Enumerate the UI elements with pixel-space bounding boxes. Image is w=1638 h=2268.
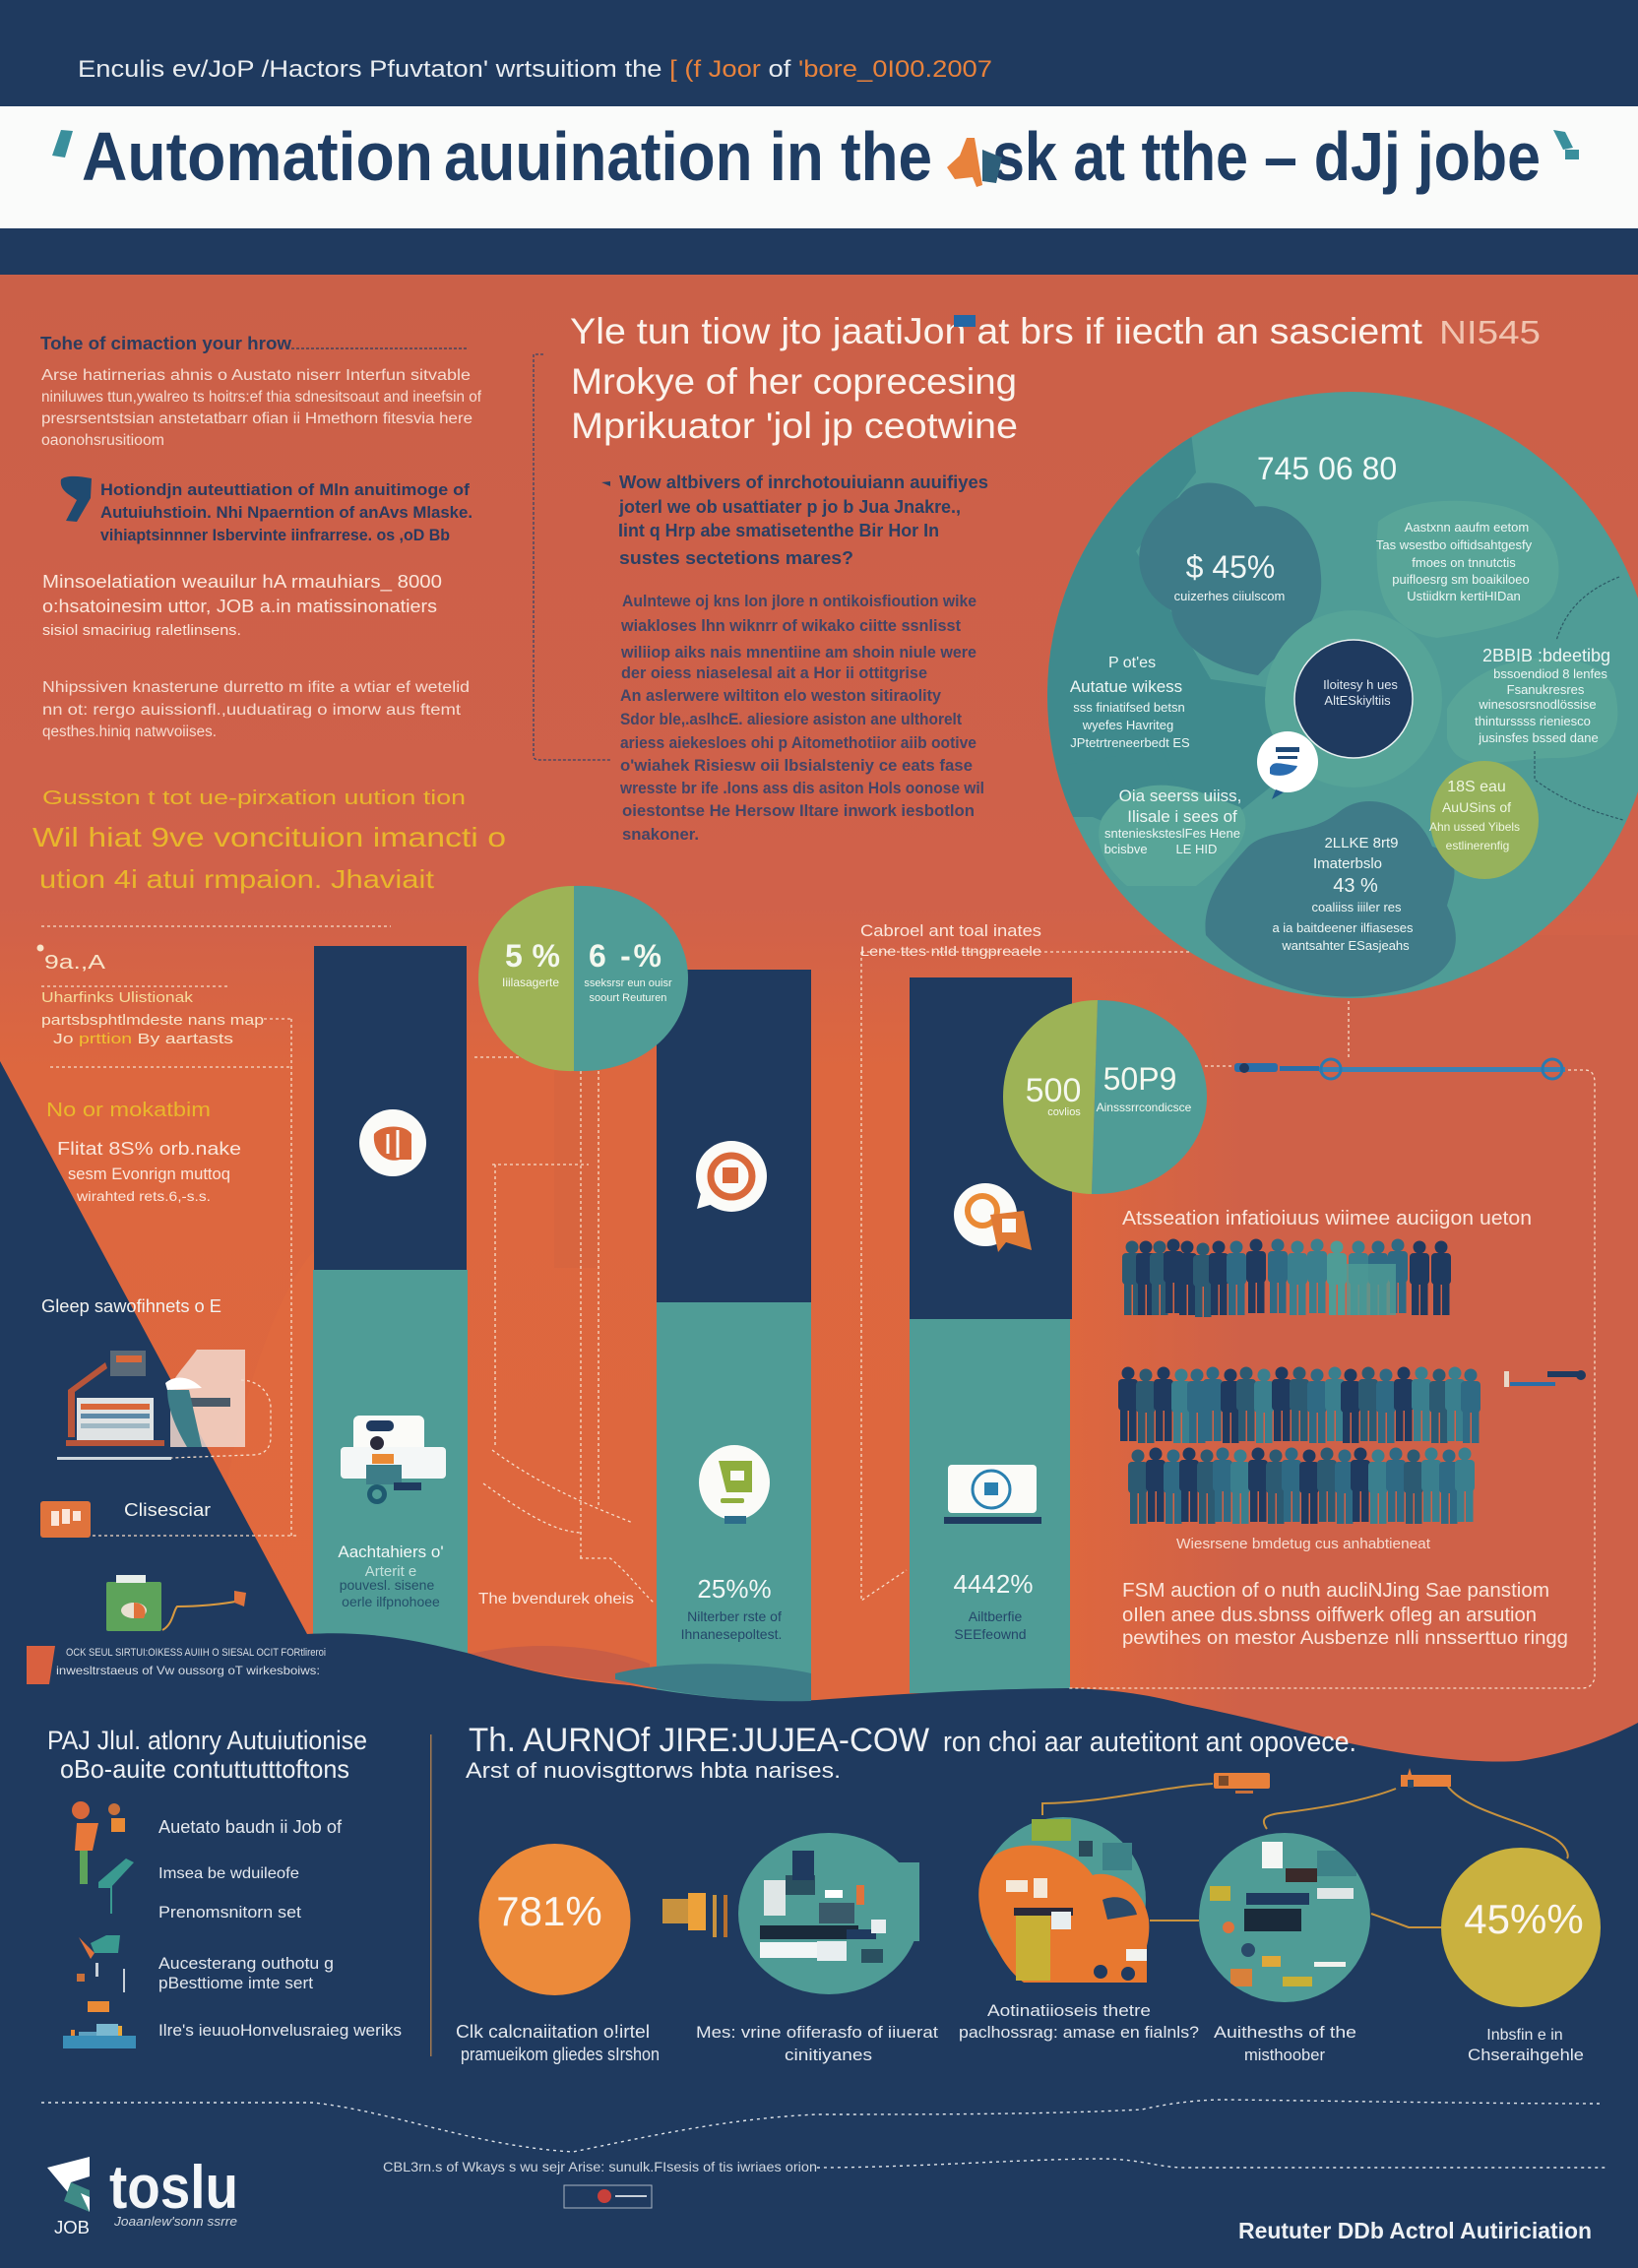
- note: stat lines: sesm Evonrign muttoq: [68, 1165, 230, 1183]
- chart: big circle diagram: [1047, 392, 1638, 998]
- text: lower left blob: snteniesksteslFes Hene: [1104, 826, 1240, 841]
- captions: pramueikom gliedes sIrshon: [461, 2045, 660, 2064]
- flow node: orange box 1: [1214, 1773, 1270, 1794]
- title text: – dJj jobe: [1264, 118, 1541, 195]
- crowd paragraph: FSM auction of o nuth aucliNJing Sae panstiom: [1122, 1580, 1549, 1602]
- crowd paragraph: [1122, 1580, 1568, 1649]
- annotation above bars: Cabroel ant toal inates: [860, 921, 1041, 940]
- white highlight text: o:hsatoinesim uttor, JOB a.in matissinonatiers: [42, 597, 437, 616]
- text: green blob: AuUSins of: [1442, 799, 1511, 815]
- crowd caption: Wiesrsene bmdetug cus anhabtieneat: [1176, 1536, 1431, 1552]
- icon: bar 2 device: [699, 1445, 770, 1524]
- note: yellow-white callout: [37, 945, 264, 1047]
- captions: cinitiyanes: [785, 2046, 872, 2064]
- icon: gear arm: [77, 1935, 125, 2012]
- annotation above bars: [860, 921, 1041, 959]
- list items: Auetato baudn ii Job of: [158, 1817, 343, 1837]
- text: right blob: thinturssss rieniesco: [1475, 714, 1591, 728]
- pie 1 values: 6 -%: [589, 938, 662, 974]
- text: bottom blob: Imaterbslo: [1313, 855, 1382, 872]
- crowd paragraph: pewtihes on mestor Ausbenze nlli nnsserttuo ringg: [1122, 1628, 1568, 1649]
- text: lower left blob: bcisbve LE HID: [1104, 842, 1217, 856]
- intro paragraph: [41, 367, 482, 449]
- icon: orange tag: [40, 1501, 91, 1538]
- icon: small blue cable: [1504, 1370, 1586, 1387]
- text: bottom blob: coaliiss iiiler res: [1311, 900, 1402, 914]
- captions: misthoober: [1244, 2046, 1325, 2064]
- note: yellow-white callout: 9a.,A: [44, 952, 106, 974]
- crowd row 2: [1118, 1366, 1480, 1443]
- intro paragraph: presrsentstsian anstetatbarr ofian ii Hmethorn fitesvia here: [41, 410, 472, 427]
- white highlight text: [42, 572, 442, 639]
- navy callout text: [100, 480, 472, 544]
- note: stat lines: [57, 1139, 241, 1204]
- text: green blob: 18S eau: [1447, 779, 1506, 795]
- text: lower left blob: [1104, 787, 1241, 856]
- text: right blob: winesosrsnodlössise: [1478, 697, 1597, 712]
- pie: first split circle: [478, 886, 688, 1071]
- footnote with tag: [27, 1646, 326, 1684]
- text: green blob: estlinerenfig: [1446, 839, 1509, 852]
- third paragraph: [42, 679, 470, 740]
- intro paragraph: Arse hatirnerias ahnis o Austato niserr Interfun sitvable: [41, 367, 471, 384]
- centre body paragraph: oiestontse He Hersow Iltare inwork iesbotlon: [622, 802, 975, 820]
- stat: top left blob: $ 45%: [1186, 549, 1275, 585]
- label: tag text: Clisesciar: [124, 1500, 211, 1520]
- text: right blob: [1475, 646, 1610, 745]
- icon: bar 2 chat: [696, 1141, 767, 1212]
- text: right blob: jusinsfes bssed dane: [1478, 730, 1599, 745]
- centre body paragraph: snakoner.: [622, 826, 699, 844]
- text: left blob: wyefes Havriteg: [1082, 718, 1173, 732]
- text: left blob: [1070, 655, 1190, 750]
- pie 1 values: 5 %: [505, 938, 560, 974]
- note: yellow label: No or mokatbim: [46, 1100, 211, 1121]
- pie 1 values: sseksrsr eun ouisr: [584, 977, 672, 989]
- pie 2 values: [1026, 1061, 1192, 1118]
- footer: logo: Joaanlew'sonn ssrre: [113, 2214, 237, 2229]
- icon: blue workstation: [63, 2024, 136, 2048]
- icon: person at desk: [72, 1801, 134, 1914]
- crowd row 1: [1122, 1238, 1451, 1317]
- text: bar 1 labels: oerle ilfpnohoee: [342, 1594, 440, 1609]
- note: yellow-white callout: Jo prttion By aartasts: [53, 1031, 233, 1047]
- navy callout text: vihiaptsinnner Isbervinte iinfrarrese. os ,oD Bb: [100, 526, 450, 544]
- icon: navy seven mark: [61, 476, 92, 522]
- captions: Chseraihgehle: [1468, 2046, 1584, 2064]
- panel: left column notes: [37, 945, 264, 1316]
- captions: Inbsfin e in: [1486, 2027, 1563, 2044]
- flow heading: Arst of nuovisgttorws hbta narises.: [466, 1758, 841, 1783]
- flow node: orange box 2: [1401, 1768, 1451, 1788]
- icon: white chat bubble: [1257, 731, 1318, 799]
- green blob: [1430, 761, 1539, 879]
- text: left blob: Autatue wikess: [1070, 677, 1182, 696]
- footer: reference box: [564, 2185, 652, 2208]
- text: bar 2 labels: 25%%: [697, 1574, 772, 1604]
- centre body paragraph: wiakloses lhn wiknrr of wikako ciitte ssnlisst: [620, 617, 961, 635]
- text: top right blob: fmoes on tnnutctis: [1412, 555, 1516, 570]
- list items: [158, 1817, 402, 2040]
- text: right blob: Fsanukresres: [1507, 682, 1585, 697]
- text: left blob: JPtetrtreneerbedt ES: [1070, 735, 1190, 750]
- centre body paragraph: o'wiahek Risiesw oii lbsialsteniy ce eats fase: [620, 757, 973, 775]
- text: green blob: [1429, 779, 1520, 852]
- icon: bar 3 laptop: [944, 1465, 1041, 1524]
- flow node: teal circle board: [1199, 1833, 1370, 2002]
- stat: top left blob: cuizerhes ciiulscom: [1174, 589, 1285, 603]
- icon: bar 1 machine: [341, 1416, 446, 1504]
- text: left blob: P ot'es: [1108, 655, 1156, 671]
- text: bar 3 labels: 4442%: [954, 1569, 1033, 1599]
- stat: orange circle: 781%: [496, 1888, 602, 1934]
- panel: centre heading and question: [570, 311, 1541, 844]
- text: left blob: sss finiatifsed betsn: [1073, 700, 1185, 715]
- captions: Auithesths of the: [1214, 2023, 1356, 2042]
- white highlight text: sisiol smaciriug raletlinsens.: [42, 622, 241, 639]
- title text: [82, 118, 1541, 195]
- panel: centre heading and question: Iint q Hrp abe smatisetenthe Bir Hor In: [618, 521, 939, 540]
- text: right blob: bssoendiod 8 lenfes: [1493, 666, 1607, 681]
- centre body paragraph: ariess aiekesloes ohi p Aitomethotiior aiib ootive: [620, 734, 976, 752]
- icon: bar 1 chat: [359, 1109, 426, 1176]
- illustration: factory machine: [57, 1350, 245, 1460]
- title text: Automation: [82, 118, 433, 195]
- text: right blob: 2BBIB :bdeetibg: [1482, 646, 1610, 665]
- icon: small blue tag: [954, 315, 976, 327]
- icon: green box with wire: [106, 1575, 246, 1631]
- heading: Atsseation infatioiuus wiimee auciigon ueton: [1122, 1208, 1532, 1229]
- centre body paragraph: wresste br ife .lons ass dis asiton Hols oonose wil: [619, 780, 984, 797]
- annotation above bars: Lene ttes ntld ttngpreaele: [860, 943, 1041, 959]
- text: bottom blob: 43 %: [1333, 875, 1378, 897]
- pie 2 values: 500: [1026, 1072, 1081, 1109]
- footnote with tag: inwesltrstaeus of Vw oussorg oT wirkesboiws:: [56, 1664, 320, 1677]
- stat: yellow circle: 45%%: [1464, 1896, 1584, 1942]
- section heading: [570, 311, 1541, 446]
- stat: yellow circle: [1441, 1848, 1601, 2007]
- list heading: oBo-auite contuttutttoftons: [60, 1754, 349, 1784]
- centre body paragraph: An aslerwere wiltiton elo weston sitiraolity: [620, 687, 942, 705]
- captions: Mes: vrine ofiferasfo of iiuerat: [696, 2023, 938, 2042]
- section heading: Yle tun tiow jto jaatiJon at brs if iiecth an sasciemt: [570, 311, 1423, 351]
- captions: Clk calcnaiitation o!irtel: [456, 2022, 650, 2042]
- stat: top left blob: [1174, 549, 1285, 603]
- list items: Prenomsnitorn set: [158, 1903, 301, 1922]
- centre body paragraph: wiliiop aiks nais mnentiine am shoin niule were: [620, 644, 976, 662]
- centre body paragraph: der oiess niaselesal ait a Hor ii ottitgrise: [621, 664, 927, 682]
- flow heading: [466, 1722, 1356, 1783]
- text: bar 3 labels: Ailtberfie: [969, 1608, 1022, 1624]
- list items: Ilre's ieuuoHonvelusraieg weriks: [158, 2021, 402, 2040]
- text: bar 2 labels: [681, 1574, 782, 1642]
- bar 2: [657, 970, 811, 1706]
- logo wordmark: toslu: [109, 2154, 238, 2222]
- wave accents: [471, 1646, 650, 1685]
- title text: auuination in the: [444, 118, 932, 195]
- icon: bar 3 chat pair: [954, 1183, 1032, 1252]
- icon: orange splash in title: [947, 138, 982, 187]
- bar 1: [313, 946, 468, 1664]
- text: bottom blob: wantsahter ESasjeahs: [1281, 938, 1410, 953]
- panel: workforce crowd: [1118, 1208, 1568, 1649]
- text: lower left blob: Ilisale i sees of: [1127, 807, 1237, 826]
- subtitle text: Enculis ev/JoP /Hactors Pfuvtaton' wrtsuitiom the [ (f J oor of 'bore_0I00.2007: [78, 56, 992, 83]
- text: top right blob: Tas wsestbo oiftidsahtgesfy: [1376, 537, 1533, 552]
- pie 1 values: [502, 938, 672, 1004]
- panel: centre heading and question: joterl we ob usattiater p jo b Jua Jnakre.,: [618, 497, 961, 517]
- pie 1 values: soourt Reuturen: [590, 992, 666, 1004]
- pie 2 values: 50P9: [1103, 1061, 1176, 1097]
- footnote with tag: OCK SEUL SIRTUI:OIKESS AUIIH O SIESAL OCIT FORtlireroi: [66, 1647, 326, 1659]
- text: top right blob: Ustiidkrn kertiHIDan: [1407, 589, 1521, 603]
- text: bar 2 labels: Ihnanesepoltest.: [681, 1626, 782, 1642]
- pie 2 values: Ainsssrrcondicsce: [1097, 1101, 1192, 1114]
- icon: blue cable with nodes: [1234, 1059, 1565, 1079]
- list heading: PAJ Jlul. atlonry Autuiutionise: [47, 1726, 367, 1755]
- yellow question: Gusston t tot ue-pirxation uution tion: [42, 788, 466, 809]
- text: hub label: AltESkiyltiis: [1324, 693, 1391, 708]
- section label: Tohe of cimaction your hrow: [40, 334, 292, 353]
- connector dotted lines: [41, 926, 1595, 1688]
- footer: logo: [47, 2154, 238, 2237]
- yellow question: ution 4i atui rmpaion. Jhaviait: [39, 864, 435, 894]
- text: lower left blob: Oia seerss uiiss,: [1119, 787, 1241, 805]
- white highlight text: Minsoelatiation weauilur hA rmauhiars_ 8000: [42, 572, 442, 593]
- intro paragraph: oaonohsrusitioom: [41, 432, 164, 449]
- crowd paragraph: oIlen anee dus.sbnss oiffwerk ofleg an arsution: [1122, 1605, 1537, 1626]
- panel: bottom left list: [47, 1726, 402, 2048]
- text: bar 1 labels: Aachtahiers o': [338, 1543, 444, 1561]
- note: illustration heading: Gleep sawofihnets o E: [41, 1296, 221, 1316]
- panel: centre heading and question: sustes sectetions mares?: [619, 548, 853, 568]
- panel: centre heading and question: Wow altbivers of inrchotouiuiann auuifiyes: [619, 472, 988, 492]
- footer: logo: JOB: [54, 2218, 90, 2237]
- navy callout text: Hotiondjn auteuttiation of Mln anuitimoge of: [100, 480, 470, 499]
- navy callout text: Autuiuhstioin. Nhi Npaerntion of anAvs Mlaske.: [100, 503, 472, 522]
- icon: right teal leaf: [1553, 130, 1579, 159]
- section heading: Mrokye of her coprecesing: [571, 361, 1017, 402]
- third paragraph: qesthes.hiniq natwvoiises.: [42, 724, 217, 740]
- header band: subtitle: [0, 0, 1638, 106]
- centre body paragraph: [619, 593, 984, 844]
- text: green blob: Ahn ussed Yibels: [1429, 820, 1520, 834]
- text: bar 1 labels: [338, 1543, 444, 1609]
- third paragraph: Nhipssiven knasterune durretto m ifite a wtiar ef wetelid: [42, 679, 470, 696]
- centre body paragraph: Sdor ble,.aslhcE. aliesiore asiston ane ulthorelt: [620, 711, 962, 728]
- note: stat lines: wirahted rets.6,-s.s.: [76, 1188, 211, 1204]
- list items: Imsea be wduileofe: [158, 1865, 299, 1882]
- text: bottom blob: [1272, 835, 1414, 953]
- yellow question: Wil hiat 9ve voncituion imancti o: [32, 822, 506, 852]
- text: bottom blob: a ia baitdeener ilfiaseses: [1272, 920, 1414, 935]
- captions: paclhossrag: amase en fialnls?: [959, 2023, 1199, 2042]
- list heading: [47, 1726, 367, 1784]
- text: bar 3 labels: [954, 1569, 1033, 1642]
- panel: process flow: [456, 1722, 1601, 2064]
- flow heading: Th. AURNOf JIRE:JUJEA-COW: [469, 1722, 929, 1759]
- note: yellow-white callout: partsbsphtlmdeste nans map: [41, 1012, 264, 1029]
- note: yellow-white callout: Uharfinks Ulistionak: [41, 989, 194, 1006]
- text: bar 2 labels: Nilterber rste of: [687, 1608, 782, 1624]
- crowd row 3: [1128, 1447, 1475, 1524]
- third paragraph: nn ot: rergo auissionfl.,uuduatirag o imorw aus ftemt: [42, 702, 462, 719]
- pie: second split circle: [1003, 1000, 1207, 1194]
- text: bar 3 labels: SEEfeownd: [954, 1626, 1027, 1642]
- stat: orange circle: [478, 1844, 630, 1995]
- flow node: orange teal machine: [978, 1817, 1149, 1983]
- text: top right blob: [1376, 520, 1533, 603]
- flow node: teal circle machine: [738, 1833, 919, 1994]
- connectors: [1042, 1784, 1568, 1927]
- text: between bars label: The bvendurek oheis: [478, 1591, 634, 1607]
- bullet question: [601, 481, 610, 486]
- list items: Aucesterang outhotu g: [158, 1954, 334, 1973]
- section heading: Mprikuator 'jol jp ceotwine: [571, 406, 1018, 446]
- panel: left intro text: [32, 334, 506, 894]
- yellow question: [32, 788, 506, 894]
- pie 2 values: covlios: [1047, 1106, 1081, 1118]
- flow heading: ron choi aar autetitont ant opovece.: [943, 1727, 1356, 1758]
- navy base with wave and diagonal: [0, 1061, 1638, 2268]
- captions: Aotinatiioseis thetre: [987, 2001, 1151, 2020]
- list items: pBesttiome imte sert: [158, 1974, 313, 1992]
- logo mark: [47, 2157, 90, 2212]
- circle headline: 745 06 80: [1257, 451, 1397, 486]
- bar 3: [910, 977, 1072, 1693]
- text: top right blob: puifloesrg sm boaikiloeo: [1392, 572, 1530, 587]
- text: bar 1 labels: Arterit e: [365, 1563, 416, 1580]
- footer dotted waves: [41, 2100, 1607, 2168]
- background: orange panel: [0, 275, 1638, 1771]
- text: hub label: Iloitesy h ues: [1323, 677, 1398, 692]
- footer: credit: Reututer DDb Actrol Autiriciation: [1238, 2218, 1592, 2243]
- captions: [456, 2001, 1584, 2064]
- text: bottom blob: 2LLKE 8rt9: [1324, 835, 1399, 851]
- text: hub label: [1323, 677, 1398, 708]
- icon: connector plug: [662, 1893, 727, 1937]
- centre body paragraph: Aulntewe oj kns lon jlore n ontikoisfioution wike: [622, 593, 976, 610]
- icon: left teal leaf: [52, 130, 73, 158]
- title text: sk at tthe: [992, 118, 1248, 195]
- ring and navy hub: [1265, 610, 1442, 788]
- pie 1 values: Iiilasagerte: [502, 976, 559, 989]
- footer: source line: CBL3rn.s of Wkays s wu sejr Arise: sunulk.FIsesis of tis iwriaes orion: [383, 2159, 817, 2174]
- intro paragraph: niniluwes ttun,ywalreo ts hoitrs:ef thia sdnesitsoaut and ineefsin of: [41, 389, 482, 406]
- note: stat lines: Flitat 8S% orb.nake: [57, 1139, 241, 1159]
- title band: [0, 106, 1638, 275]
- section heading: NI545: [1439, 314, 1541, 350]
- text: bar 1 labels: pouvesl. sisene: [340, 1577, 434, 1593]
- bar chart: three stacked bars: [313, 946, 1072, 1706]
- text: top right blob: Aastxnn aaufm eetom: [1405, 520, 1529, 535]
